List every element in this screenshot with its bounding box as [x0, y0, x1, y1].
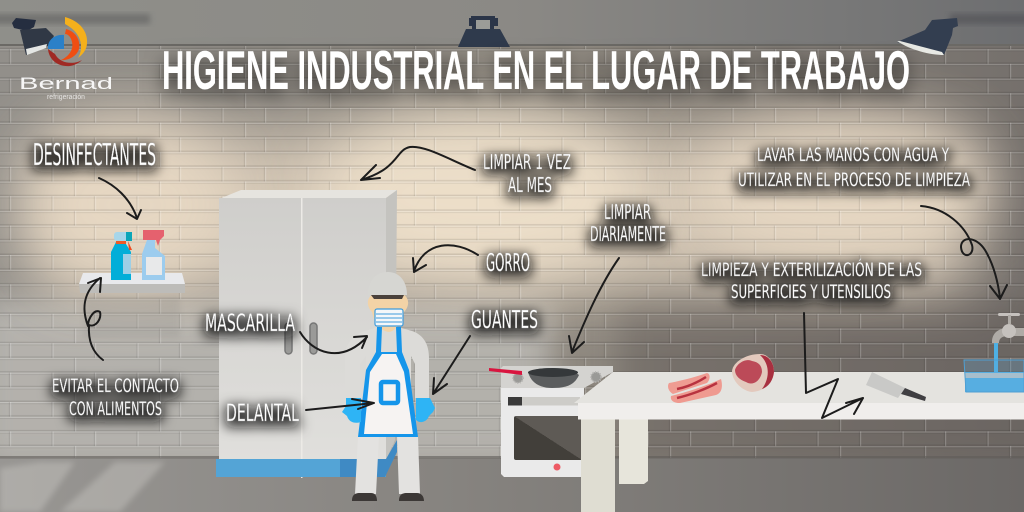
- arrow: lavar to tap: [921, 206, 1007, 299]
- fridge side: [386, 190, 397, 460]
- oven button: [554, 464, 560, 470]
- shoes: [352, 493, 424, 501]
- icon: steak: [732, 354, 774, 392]
- apron: [358, 327, 418, 437]
- icon: cleaver knife: [866, 372, 926, 401]
- icon: logo swirl: [48, 17, 87, 66]
- label: Limpiar 1 vez al mes: AL MES: [508, 173, 552, 197]
- arrow: guantes to gloves: [433, 336, 470, 394]
- icon: blue spray bottle: [111, 232, 132, 280]
- fridge top: [219, 190, 397, 199]
- label: Limpiar diariamente: [590, 200, 666, 246]
- arrow: mascarilla to mask: [300, 332, 367, 353]
- icon: ceiling lamp centre: [458, 16, 510, 47]
- face: [368, 295, 408, 332]
- stove top: [501, 366, 613, 388]
- text: DESINFECTANTES: [33, 138, 156, 173]
- label: Limpiar diariamente: DIARIAMENTE: [590, 222, 666, 246]
- table top: [574, 372, 1024, 403]
- icon: ceiling lamp right: [897, 18, 958, 55]
- front table leg: [581, 419, 615, 512]
- label: Evitar el contacto con alimentos: [52, 375, 179, 420]
- arrow: delantal to apron: [306, 399, 374, 410]
- shelf with cleaning products: [79, 230, 185, 338]
- arrow: desinfectantes to bottles: [99, 178, 141, 219]
- table front edge: [578, 403, 1024, 420]
- shelf: [79, 273, 185, 338]
- label: Limpiar diariamente: LIMPIAR: [604, 200, 651, 224]
- label: Lavar las manos: [738, 144, 970, 191]
- arrow: evitar contacto to shelf: [84, 278, 103, 360]
- logo: Bernad refrigeración: [12, 17, 113, 101]
- hair: [371, 295, 404, 299]
- arrow: limpiar stove: [569, 258, 619, 353]
- label: Limpiar 1 vez al mes: LIMPIAR 1 VEZ: [483, 150, 571, 174]
- icon: light blue spray bottle: [142, 230, 165, 280]
- face mask: [375, 309, 403, 326]
- arrow: gorro to hat: [413, 245, 478, 272]
- oven body: [501, 388, 584, 477]
- worker: [342, 272, 435, 501]
- water stream: [994, 343, 998, 378]
- work table: [574, 372, 1024, 512]
- label: Limpieza y exterilización: SUPERFICIES Y UTENSILIOS: [731, 281, 891, 303]
- label: Limpieza y exterilización: [701, 257, 922, 303]
- label: Mascarilla: MASCARILLA: [205, 309, 295, 337]
- fridge base: [216, 440, 397, 477]
- icon: lamp left: [12, 18, 54, 55]
- stove and oven: [489, 366, 613, 477]
- icon: bacon meat: [668, 373, 722, 403]
- label: Evitar el contacto con alimentos: CON ALIMENTOS: [69, 398, 162, 420]
- fridge doors: [219, 198, 386, 460]
- arrow: limpiar fridge: [361, 147, 475, 180]
- oven display: [508, 397, 580, 406]
- tap: [992, 313, 1024, 343]
- label: Delantal: DELANTAL: [226, 399, 299, 427]
- logo tagline: refrigeración: [47, 94, 85, 101]
- hard hat: [368, 272, 407, 295]
- gloves: [342, 398, 435, 423]
- logo wordmark: Bernad: [19, 75, 113, 93]
- basin: [964, 360, 1024, 392]
- knobs: [513, 372, 601, 383]
- label: Guantes: GUANTES: [471, 305, 538, 334]
- coat: [345, 327, 429, 432]
- text: GORRO: [486, 248, 530, 277]
- label: Evitar el contacto con alimentos: EVITAR EL CONTACTO: [52, 375, 179, 397]
- oven window: [514, 416, 582, 460]
- arrow: limpieza to knife: [804, 313, 863, 418]
- label: Limpiar 1 vez al mes: [483, 150, 571, 197]
- refrigerator: [216, 190, 397, 478]
- water basin and tap: [964, 313, 1024, 392]
- frying pan: [489, 368, 579, 388]
- legs: [355, 436, 420, 494]
- back table leg: [619, 419, 648, 484]
- fridge handles: [285, 323, 317, 354]
